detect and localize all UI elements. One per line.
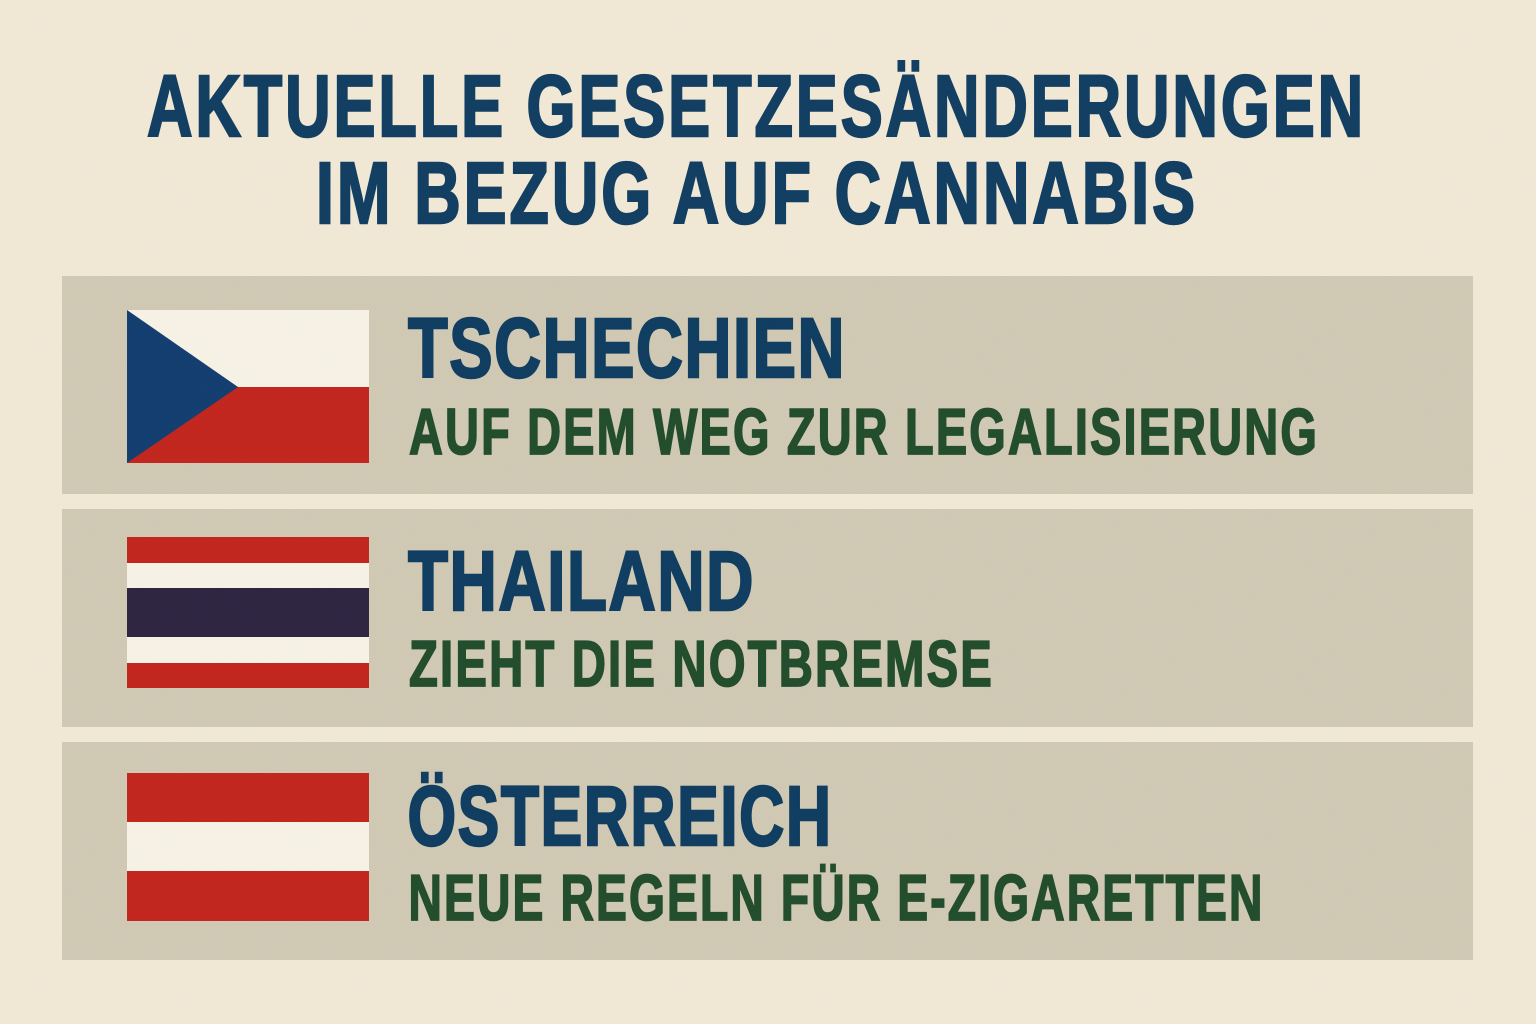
country name: Österreich: ÖSTERREICH: [408, 769, 832, 863]
flag: Austria: [127, 773, 369, 921]
panel: Österreich: [62, 742, 1473, 960]
panel: Tschechien: [62, 276, 1473, 494]
title: [147, 58, 1366, 242]
country name: Thailand: THAILAND: [408, 534, 755, 628]
country name: Tschechien: TSCHECHIEN: [408, 301, 846, 395]
flag: Thailand: [127, 537, 369, 688]
panel: Thailand: [62, 509, 1473, 727]
flag: Czech Republic: [127, 310, 369, 463]
status: Thailand: ZIEHT DIE NOTBREMSE: [409, 627, 994, 700]
title: IM BEZUG AUF CANNABIS: [316, 145, 1198, 242]
